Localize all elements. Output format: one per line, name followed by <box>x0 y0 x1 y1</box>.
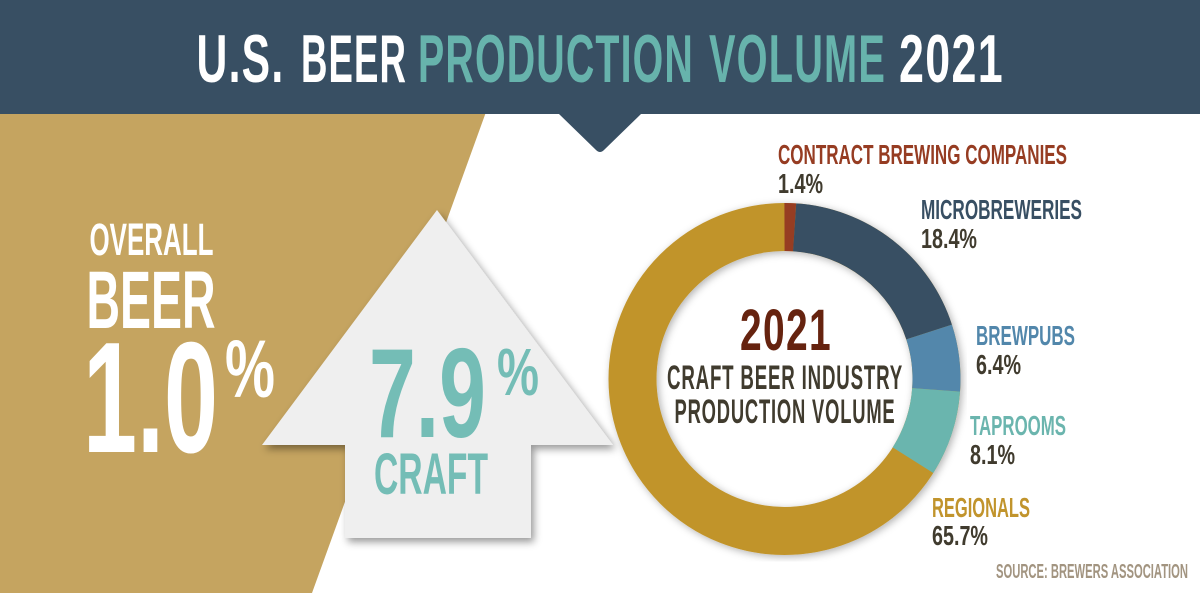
label: contract brewing <box>778 139 1067 199</box>
overall beer text <box>83 214 275 486</box>
donut center label <box>667 298 903 431</box>
header banner <box>0 0 1200 152</box>
title: U.S. <box>196 21 284 97</box>
label: microbreweries <box>921 194 1082 254</box>
craft value: 7.9 <box>369 322 486 464</box>
title: 2021 <box>899 21 1004 97</box>
label: microbreweries: 18.4% <box>921 223 977 254</box>
label: brewpubs: BREWPUBS <box>976 320 1075 351</box>
donut chart <box>632 227 937 531</box>
label: regionals: REGIONALS <box>932 492 1030 523</box>
arrow: craft up <box>262 210 613 538</box>
label: brewpubs <box>976 320 1075 380</box>
label: taprooms: TAPROOMS <box>970 410 1066 441</box>
label: taprooms <box>970 410 1066 470</box>
overall beer text: 1.0 <box>83 310 218 486</box>
title <box>196 21 1004 97</box>
arrow: craft up: CRAFT <box>374 442 488 507</box>
label: regionals <box>932 492 1030 551</box>
overall beer text: OVERALL <box>90 214 214 265</box>
overall beer text: % <box>225 324 275 415</box>
donut center label: PRODUCTION VOLUME <box>674 393 896 431</box>
title: VOLUME <box>709 21 886 97</box>
arrow: craft up: % <box>497 335 539 410</box>
title: PRODUCTION <box>418 21 694 97</box>
label: contract brewing: 1.4% <box>778 168 823 199</box>
overall beer text: BEER <box>86 255 216 346</box>
donut center label: 2021 <box>740 298 832 363</box>
label: regionals: 65.7% <box>932 520 988 551</box>
label: microbreweries: MICROBREWERIES <box>921 194 1082 225</box>
label: brewpubs: 6.4% <box>976 349 1021 380</box>
label: taprooms: 8.1% <box>970 439 1015 470</box>
panel: tan background <box>0 112 486 593</box>
donut center label: CRAFT BEER INDUSTRY <box>667 359 903 397</box>
title: BEER <box>301 21 407 97</box>
